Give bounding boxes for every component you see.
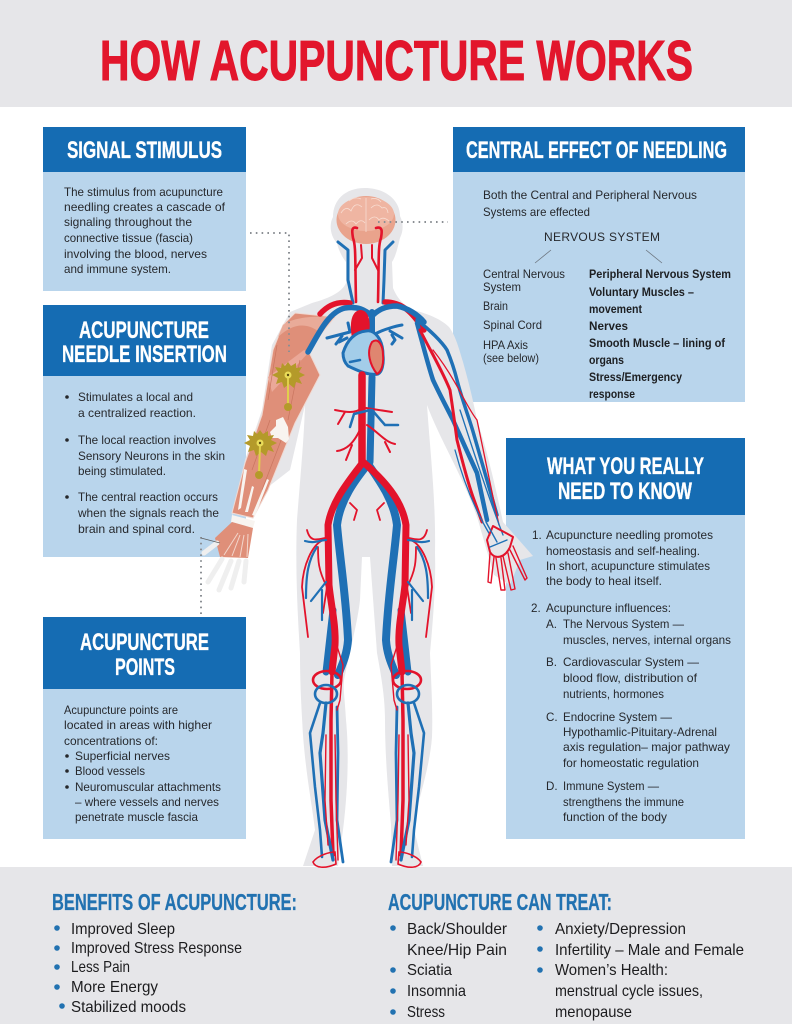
text block: peripheral nervous system: Peripheral Nervous System xyxy=(589,268,731,281)
list: can treat column two: Women’s Health: xyxy=(555,962,668,979)
list: can treat column two: Infertility – Male and Female xyxy=(555,942,744,959)
text block: central nervous system: HPA Axis xyxy=(483,339,528,352)
elbow tendons xyxy=(270,417,289,443)
text block: acupuncture points xyxy=(64,704,221,824)
text block: point two: blood flow, distribution of xyxy=(563,672,698,685)
list: can treat column one: Sciatia xyxy=(407,962,452,979)
text block: point two: axis regulation– major pathway xyxy=(563,741,730,754)
text block: point two: strengthens the immune xyxy=(563,796,684,809)
forearm tendons xyxy=(238,469,269,516)
arteries and veins: neck and arch xyxy=(308,228,424,352)
list: can treat column one: Back/Shoulder xyxy=(407,921,508,938)
list: can treat column two: menstrual cycle issues, xyxy=(555,983,703,1000)
text block: acupuncture points: penetrate muscle fascia xyxy=(75,811,199,824)
text block: needle insertion bullets: brain and spinal cord. xyxy=(78,523,195,536)
heading: needle insertion: ACUPUNCTURE xyxy=(79,317,209,344)
heading: what you really need to know xyxy=(547,453,704,505)
text block: point one: 1. xyxy=(532,529,542,542)
right hand vessels xyxy=(486,522,527,590)
text block: point two: function of the body xyxy=(563,811,667,824)
text block: acupuncture points: Acupuncture points are xyxy=(64,704,178,717)
text block: intro: Systems are effected xyxy=(483,206,590,219)
list: can treat column one: Insomnia xyxy=(407,983,466,1000)
panel: acupuncture can treat xyxy=(388,889,744,1021)
text block: point two: A. xyxy=(546,618,557,631)
list: benefits: Less Pain xyxy=(71,959,130,976)
text block: point two: Hypothamlic-Pituitary-Adrenal xyxy=(563,726,717,739)
text block: intro: Both the Central and Peripheral Nervous xyxy=(483,189,697,202)
text block: signal stimulus: connective tissue (fascia) xyxy=(64,232,193,245)
nervous system diagram heading: NERVOUS SYSTEM xyxy=(544,230,660,244)
fingers xyxy=(204,543,246,590)
heading: can treat: ACUPUNCTURE CAN TREAT: xyxy=(388,889,612,915)
text block: point two: Cardiovascular System — xyxy=(563,656,699,669)
text block: acupuncture points: Superficial nerves xyxy=(75,750,170,763)
list: can treat column two xyxy=(537,921,744,1021)
list: benefits xyxy=(54,921,242,1016)
text block: needle insertion bullets: a centralized reaction. xyxy=(78,407,196,420)
text block: peripheral nervous system: Stress/Emergency xyxy=(589,371,682,384)
text block: point one xyxy=(532,529,713,588)
panel: signal stimulus xyxy=(43,127,246,291)
text block: needle insertion bullets xyxy=(65,391,225,536)
header band xyxy=(0,0,792,107)
text block: point two: for homeostatic regulation xyxy=(563,757,699,770)
text block: peripheral nervous system xyxy=(589,268,731,401)
text block: intro xyxy=(483,189,697,219)
text block: point two: Endocrine System — xyxy=(563,711,672,724)
heading: what you really need to know: WHAT YOU REALLY xyxy=(547,453,704,480)
text block: central nervous system: Brain xyxy=(483,300,508,313)
heading: needle insertion xyxy=(62,317,227,368)
body silhouette xyxy=(232,188,533,866)
text block: point one: homeostasis and self-healing. xyxy=(546,545,700,558)
heading: acupuncture points xyxy=(80,629,209,681)
text block: point two: The Nervous System — xyxy=(563,618,684,631)
arteries and veins: right leg xyxy=(363,462,432,867)
text block: central nervous system: System xyxy=(483,281,521,294)
text block: point two: 2. xyxy=(531,602,541,615)
list: can treat column two: menopause xyxy=(555,1004,632,1021)
panel: acupuncture needle insertion xyxy=(43,305,246,557)
panel: what you really need to know xyxy=(506,438,745,839)
text block: needle insertion bullets: Sensory Neurons in the skin xyxy=(78,450,225,463)
brain xyxy=(336,196,396,244)
text block: peripheral nervous system: Smooth Muscle – lining of xyxy=(589,337,725,350)
text block: acupuncture points: Neuromuscular attachments xyxy=(75,781,221,794)
text block: signal stimulus: needling creates a cascade of xyxy=(64,201,226,214)
hand xyxy=(215,522,253,558)
panel: acupuncture points xyxy=(43,617,246,839)
text block: acupuncture points: concentrations of: xyxy=(64,735,158,748)
panel: central effect of needling xyxy=(453,127,745,402)
panel: benefits of acupuncture xyxy=(52,889,297,1016)
list: can treat column two: Anxiety/Depression xyxy=(555,921,686,938)
body figure with circulatory system xyxy=(204,188,533,867)
text block: peripheral nervous system: response xyxy=(589,388,635,401)
text block: point two: C. xyxy=(546,711,558,724)
text block: signal stimulus: signaling throughout the xyxy=(64,216,192,229)
heading: signal stimulus: SIGNAL STIMULUS xyxy=(67,137,222,164)
arteries and veins: right arm xyxy=(417,320,503,535)
text block: point two: nutrients, hormones xyxy=(563,688,664,701)
text block: needle insertion bullets: Stimulates a local and xyxy=(78,391,193,404)
list: benefits: Improved Stress Response xyxy=(71,940,242,957)
text block: point two: Acupuncture influences: xyxy=(546,602,671,615)
arteries and veins: torso xyxy=(335,375,398,462)
text block: signal stimulus: The stimulus from acupuncture xyxy=(64,186,223,199)
list: benefits: Stabilized moods xyxy=(71,999,186,1016)
heart xyxy=(327,310,402,374)
heading: acupuncture points: POINTS xyxy=(115,654,175,681)
groin branches xyxy=(350,503,384,520)
text block: needle insertion bullets: when the signals reach the xyxy=(77,507,219,520)
list: can treat column one xyxy=(390,921,508,1021)
text block: central nervous system xyxy=(483,268,565,365)
arteries and veins: left leg xyxy=(302,462,368,867)
text block: point two: B. xyxy=(546,656,557,669)
list: benefits: Improved Sleep xyxy=(71,921,175,938)
text block: acupuncture points: Blood vessels xyxy=(75,765,145,778)
list: can treat column one: Knee/Hip Pain xyxy=(407,942,507,959)
text block: central nervous system: (see below) xyxy=(483,352,539,365)
text block: acupuncture points: – where vessels and nerves xyxy=(75,796,219,809)
text block: needle insertion bullets: The local reaction involves xyxy=(78,434,216,447)
text block: point two: muscles, nerves, internal organs xyxy=(563,634,731,647)
text block: acupuncture points: located in areas with higher xyxy=(64,719,212,732)
heading: acupuncture points: ACUPUNCTURE xyxy=(80,629,209,656)
needle point: upper arm xyxy=(272,362,305,411)
text block: signal stimulus xyxy=(64,186,226,276)
list: benefits: More Energy xyxy=(71,979,158,996)
heading: what you really need to know: NEED TO KNOW xyxy=(558,478,692,505)
heading: needle insertion: NEEDLE INSERTION xyxy=(62,341,227,368)
text block: peripheral nervous system: organs xyxy=(589,354,624,367)
text block: peripheral nervous system: Nerves xyxy=(589,320,628,333)
text block: point one: In short, acupuncture stimulates xyxy=(546,560,710,573)
text block: peripheral nervous system: Voluntary Muscles – xyxy=(589,286,695,299)
footer band xyxy=(0,867,792,1024)
text block: needle insertion bullets: being stimulated. xyxy=(78,465,166,478)
text block: central nervous system: Central Nervous xyxy=(483,268,565,281)
dotted connector: signal stimulus xyxy=(250,233,289,352)
needle point: forearm xyxy=(244,430,277,479)
text block: central nervous system: Spinal Cord xyxy=(483,319,542,332)
dotted connector: central effect xyxy=(378,221,448,223)
text block: peripheral nervous system: movement xyxy=(589,303,642,316)
text block: signal stimulus: involving the blood, nerves xyxy=(64,248,207,261)
muscular left arm xyxy=(204,313,335,590)
wrist band xyxy=(231,515,255,528)
text block: point two: D. xyxy=(546,780,558,793)
list: can treat column one: Stress xyxy=(407,1004,445,1021)
nervous system diagram heading xyxy=(535,230,662,263)
text block: point one: the body to heal itself. xyxy=(546,575,662,588)
text block: point two xyxy=(531,602,731,824)
text block: signal stimulus: and immune system. xyxy=(64,263,171,276)
text block: needle insertion bullets: The central reaction occurs xyxy=(78,491,218,504)
text block: point two: Immune System — xyxy=(563,780,659,793)
text block: point one: Acupuncture needling promotes xyxy=(546,529,713,542)
heading: benefits: BENEFITS OF ACUPUNCTURE: xyxy=(52,889,297,915)
dotted connector: acupuncture points xyxy=(201,537,220,615)
